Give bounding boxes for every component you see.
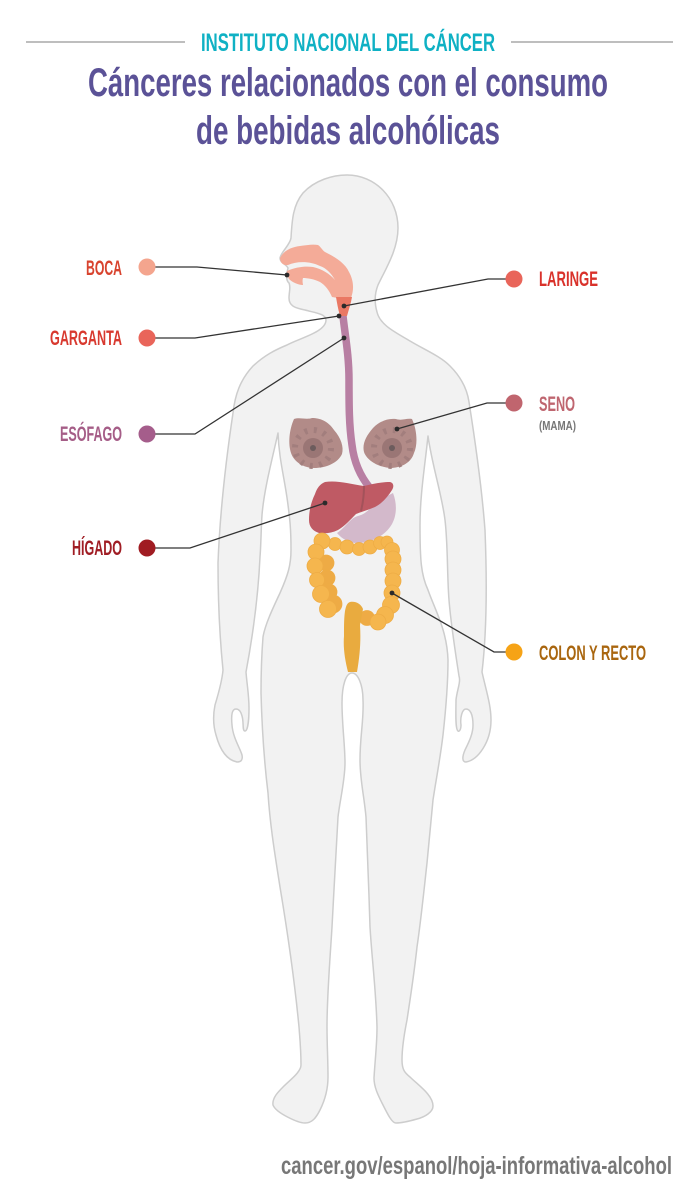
label: laringe: LARINGE — [539, 268, 598, 291]
organ: stomach — [337, 493, 396, 543]
organ: colon — [307, 533, 401, 630]
label: seno: SENO — [539, 393, 575, 416]
organ: esophagus — [343, 316, 370, 488]
label: colon y recto — [390, 591, 646, 665]
organ: right breast — [363, 419, 416, 468]
human body silhouette — [214, 175, 491, 1123]
organ: mouth — [280, 245, 353, 298]
label: garganta: GARGANTA — [50, 327, 122, 350]
organ: throat and larynx — [336, 297, 352, 316]
label: laringe — [342, 268, 598, 308]
organ: liver — [309, 481, 393, 533]
label: garganta — [50, 314, 341, 350]
label: seno: (MAMA) — [539, 418, 576, 433]
organ: rectum — [344, 602, 363, 672]
title — [88, 61, 608, 153]
label: esófago: ESÓFAGO — [60, 422, 122, 446]
label: boca — [86, 257, 289, 280]
label: esófago — [60, 336, 346, 446]
label: boca: BOCA — [86, 257, 122, 280]
organ: left breast — [289, 418, 343, 468]
title: de bebidas alcohólicas — [196, 109, 500, 153]
label: hígado: HÍGADO — [72, 537, 122, 560]
label: hígado — [72, 501, 327, 560]
label: seno — [395, 393, 576, 433]
header: institute name: INSTITUTO NACIONAL DEL CÁNCER — [201, 28, 495, 57]
